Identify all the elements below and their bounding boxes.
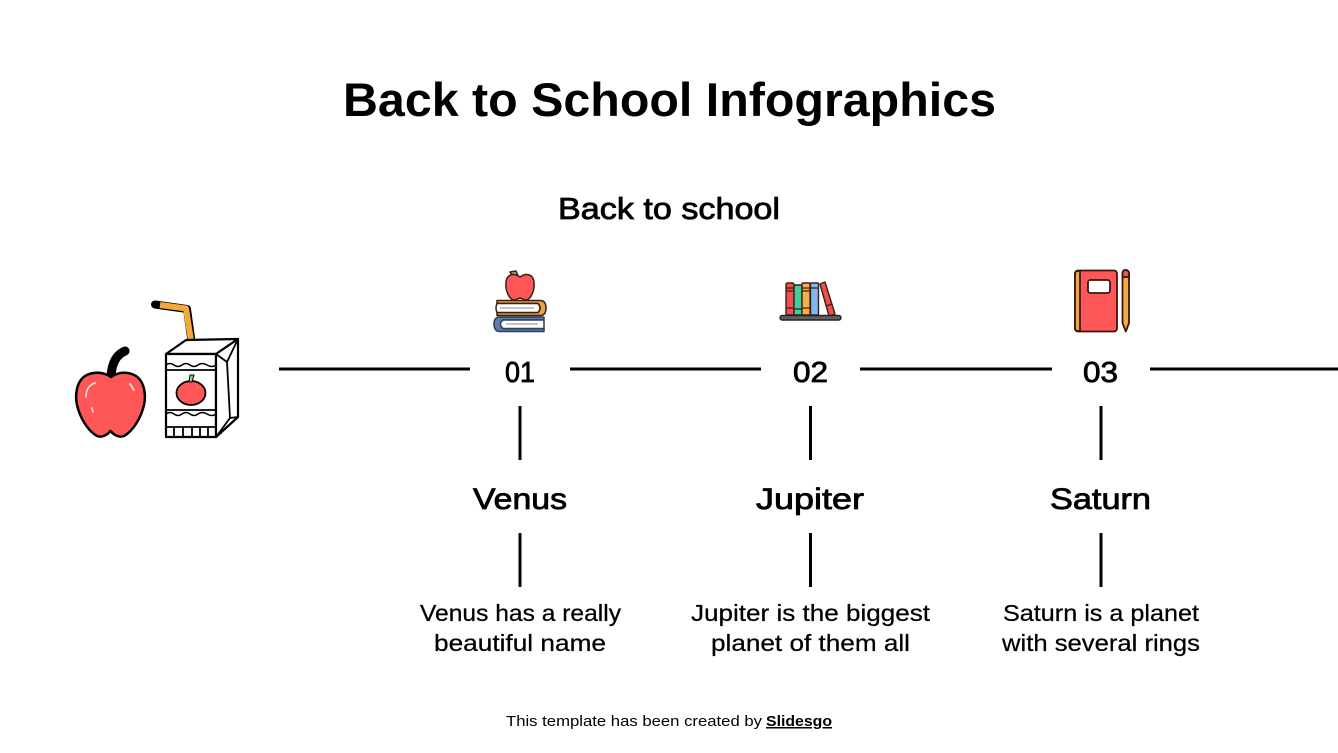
connector [518,406,522,460]
number 02: 02 [793,357,828,389]
icon: juice box [155,304,238,437]
heading: Saturn: Saturn [1050,483,1151,516]
footer credit: Slidesgo [766,713,832,730]
number 01: 01 [505,357,535,389]
column: Jupiter [691,282,931,656]
subtitle: Back to school [558,191,780,226]
timeline line [279,368,1338,370]
heading: Venus: Venus [473,483,567,516]
description: planet of them all [711,630,910,656]
description: with several rings [1001,630,1200,656]
heading: Jupiter: Jupiter [756,483,864,516]
column: Saturn [1001,270,1200,656]
number 03: 03 [1083,357,1118,389]
connector [1100,406,1102,460]
description: Jupiter is the biggest [691,600,931,626]
connector [1100,533,1102,587]
column: Venus [420,271,622,656]
connector [518,533,522,587]
icon: apple and juice box [76,304,238,437]
footer credit: This template has been created by [506,713,763,730]
description [691,600,931,656]
connector [809,533,812,587]
description [1001,600,1200,656]
title: Back to School Infographics [343,73,996,126]
icon: apple [76,351,145,437]
description: Venus has a really [420,600,622,626]
connector [809,406,812,460]
description: Saturn is a planet [1003,600,1200,626]
description [420,600,622,656]
icon: bookshelf [780,282,841,320]
icon: notebook and pencil [1075,270,1129,332]
description: beautiful name [434,630,606,656]
icon: apple on books [494,271,546,332]
